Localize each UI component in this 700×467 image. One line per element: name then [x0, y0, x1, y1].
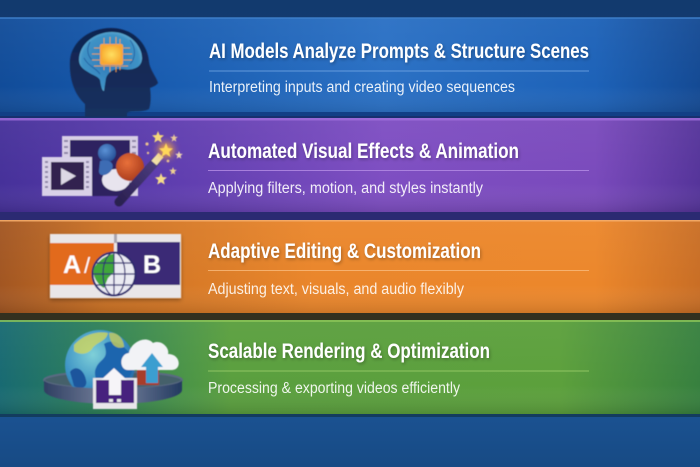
icon: head with brain chip: [70, 28, 158, 117]
icon: A/B split with globe: B: [143, 251, 161, 279]
panel: adaptive editing: [0, 220, 700, 320]
text: scalable rendering description: Processing & exporting videos efficiently: [208, 380, 460, 397]
heading: AI models: AI Models Analyze Prompts & Structure Scenes: [209, 40, 589, 63]
text: adaptive editing description: Adjusting text, visuals, and audio flexibly: [208, 281, 464, 298]
panel: AI models: [0, 17, 700, 119]
panel: visual effects: [0, 118, 700, 220]
heading: scalable rendering: Scalable Rendering & Optimization: [208, 340, 490, 363]
text: AI models description: Interpreting inputs and creating video sequences: [209, 79, 515, 96]
icon: A/B split with globe: A: [63, 251, 81, 279]
heading: visual effects: Automated Visual Effects & Animation: [208, 140, 519, 163]
text: visual effects description: Applying filters, motion, and styles instantly: [208, 180, 483, 197]
icon: globe, cloud and upload on ring: [44, 330, 182, 409]
icon: A/B split with globe: [50, 234, 181, 298]
heading: adaptive editing: Adaptive Editing & Customization: [208, 240, 481, 263]
icon: A/B split with globe: /: [84, 253, 91, 278]
icon: film frames and magic wand: [42, 131, 183, 202]
panel: scalable rendering: [0, 320, 700, 417]
